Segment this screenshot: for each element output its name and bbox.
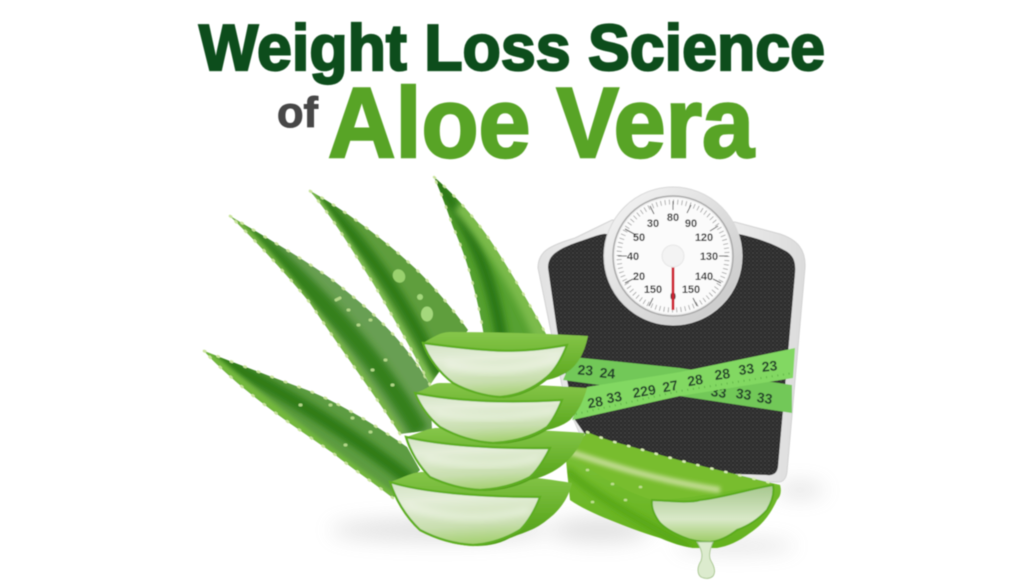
dial numbers: 130 — [700, 251, 718, 263]
measuring tape: 33 — [710, 383, 728, 401]
measuring tape: 28 — [586, 393, 604, 411]
ground shadows — [330, 483, 824, 552]
word: of: of — [277, 89, 319, 137]
dial numbers: 80 — [667, 212, 679, 224]
leaf: upper left — [225, 210, 440, 440]
upper peel surface — [578, 434, 705, 499]
measuring tape: 28 — [713, 365, 731, 383]
dial numbers — [627, 212, 718, 303]
stacked aloe slices — [385, 332, 588, 548]
measuring tape: 33 — [737, 360, 755, 378]
dial numbers: 40 — [627, 251, 639, 263]
dial numbers: 50 — [633, 232, 645, 244]
large cut leaf — [560, 425, 785, 578]
dial numbers: 0 — [670, 291, 676, 303]
title — [199, 11, 825, 178]
water droplets — [390, 267, 408, 285]
measuring tape: 33 — [605, 388, 623, 406]
heading line: Aloe Vera: Aloe Vera — [328, 67, 755, 178]
slice 1 (top) — [420, 332, 588, 400]
measuring tape: 28 — [686, 371, 704, 389]
measuring tape: 23 — [761, 357, 778, 375]
leaf: upright — [432, 175, 546, 335]
dial numbers: 90 — [685, 218, 697, 230]
dial hub — [662, 245, 684, 267]
measuring tape: 229 — [631, 381, 657, 401]
illustration — [200, 172, 805, 578]
dial bezel — [604, 187, 742, 325]
slice 3 — [402, 428, 585, 493]
slice 4 (bottom) — [385, 472, 572, 548]
aloe leaves — [200, 172, 550, 505]
cut face — [652, 485, 773, 542]
dial numbers: 140 — [695, 271, 713, 283]
scale body — [538, 220, 805, 482]
dial numbers: 20 — [633, 271, 645, 283]
tape strip rising right — [572, 348, 795, 420]
measuring tape: 27 — [661, 377, 679, 395]
dial numbers: 150 — [644, 284, 662, 296]
leaf: centre — [305, 186, 475, 391]
measuring tape — [563, 348, 795, 420]
dial numbers: 120 — [695, 232, 713, 244]
measuring tape: 33 — [756, 389, 774, 407]
black mat — [548, 234, 795, 475]
leaf body — [565, 432, 782, 549]
measuring tape: 24 — [599, 364, 616, 382]
tape strip falling right — [563, 357, 792, 413]
heading line: Weight Loss Science: Weight Loss Science — [199, 11, 825, 84]
leaf: lower left — [200, 345, 425, 505]
dial numbers: 30 — [647, 218, 659, 230]
needle — [672, 266, 674, 310]
dial — [604, 187, 742, 325]
dial numbers: 150 — [682, 284, 700, 296]
measuring tape: 33 — [735, 385, 753, 403]
gel drip — [697, 542, 714, 578]
dial ticks — [619, 202, 727, 310]
measuring tape: 23 — [577, 361, 594, 379]
slice 2 — [412, 383, 587, 445]
bathroom scale — [538, 187, 805, 482]
